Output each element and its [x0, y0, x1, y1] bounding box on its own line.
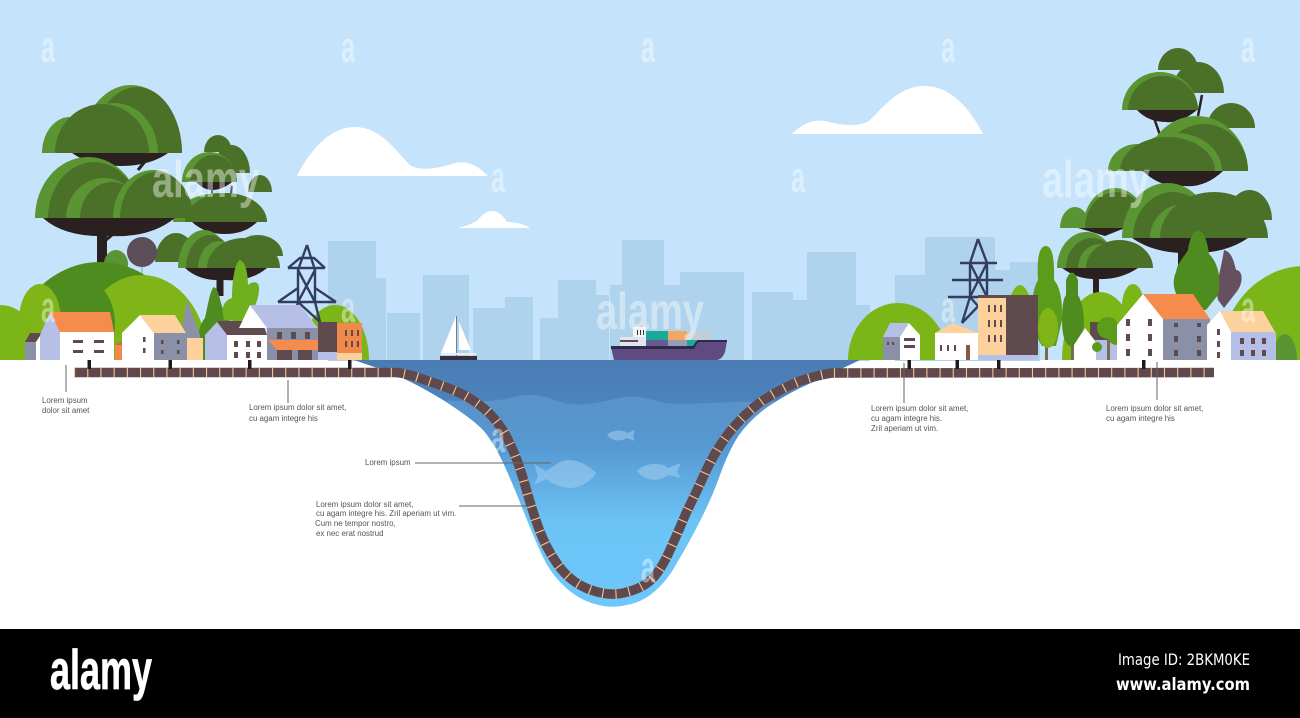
tree: lower	[155, 230, 283, 296]
house: tiny orange	[115, 338, 140, 360]
watermarks: a	[941, 283, 955, 332]
tree: top right cluster	[1122, 48, 1255, 135]
callout: left two-line: Lorem ipsum dolor sit amet,	[249, 403, 346, 412]
footer image id: Image ID: 2BKM0KE	[1118, 650, 1250, 669]
footer logo: alamy	[50, 638, 152, 701]
callout: lorem ipsum dolor sit amet short: Lorem ipsum	[42, 396, 88, 405]
watermarks: a	[641, 543, 655, 592]
right houses	[883, 294, 1276, 360]
watermarks	[41, 23, 1255, 592]
callout: left two-line	[249, 380, 346, 423]
water wave band	[445, 395, 775, 420]
house: orange roof	[40, 312, 114, 360]
cloud small	[458, 211, 530, 228]
city skyline	[328, 237, 1040, 361]
house: small behind tree	[1074, 322, 1117, 360]
tree: centre cluster	[173, 135, 272, 234]
callout: lorem ipsum dolor sit amet short: dolor sit amet	[42, 406, 90, 415]
callout: far right two-line: cu agam integre his	[1106, 414, 1175, 423]
tree: mid right	[1060, 188, 1147, 236]
sailboat	[440, 316, 477, 360]
callout: left two-line: cu agam integre his	[249, 414, 318, 423]
fish: medium	[637, 463, 681, 480]
left hills	[0, 250, 369, 360]
building: orange block	[318, 322, 362, 360]
callout: water label: Lorem ipsum	[365, 458, 411, 467]
watermarks: alamy	[152, 151, 260, 209]
footer bar	[0, 629, 1300, 718]
cloud right	[792, 86, 983, 134]
pipeline supports	[88, 360, 1146, 369]
callout: right three-line: Lorem ipsum dolor sit amet,	[871, 404, 968, 413]
watermarks: alamy	[1042, 151, 1150, 209]
callout: far right two-line	[1106, 362, 1203, 423]
callout: far right two-line: Lorem ipsum dolor sit amet,	[1106, 404, 1203, 413]
callout: pipe label: Lorem ipsum dolor sit amet,	[316, 500, 413, 509]
watermarks: a	[41, 283, 55, 332]
watermarks: a	[1241, 23, 1255, 72]
house: peach low	[935, 323, 978, 360]
cargo ship	[611, 322, 727, 360]
house: small far left	[25, 333, 51, 360]
callout: right three-line	[871, 363, 968, 433]
callout: pipe label	[315, 500, 530, 538]
bush: green leaf	[1174, 230, 1220, 310]
callout: pipe label: cu agam integre his. Zril aperiam ut vim.	[316, 509, 456, 518]
tree: upper large right	[1108, 116, 1248, 186]
callout: pipe label: ex nec erat nostrud	[316, 529, 384, 538]
callout: lorem ipsum dolor sit amet short	[42, 365, 90, 415]
house: periwinkle small	[883, 323, 920, 360]
bare brown tree	[127, 237, 157, 276]
building: tall peach and brown	[978, 295, 1038, 360]
callout: right three-line: Zril aperiam ut vim.	[871, 424, 938, 433]
right trees	[1057, 48, 1272, 310]
watermarks: alamy	[596, 283, 704, 341]
left trees	[35, 85, 283, 296]
watermarks: a	[341, 283, 355, 332]
fish: large	[534, 460, 596, 488]
tree: small round right	[1092, 317, 1127, 360]
sky background	[0, 0, 1300, 360]
left houses	[25, 305, 362, 360]
callout: pipe label: Cum ne tempor nostro,	[315, 519, 396, 528]
watermarks: a	[491, 413, 505, 462]
transmission tower left	[278, 245, 336, 325]
house: dark roof	[205, 321, 267, 360]
watermarks: a	[41, 23, 55, 72]
cloud left	[297, 127, 488, 176]
watermarks: a	[941, 23, 955, 72]
house: periwinkle roof	[239, 305, 327, 360]
bush: purple leaf	[1217, 250, 1242, 308]
callout: right three-line: cu agam integre his.	[871, 414, 942, 423]
tree: lowest right	[1057, 232, 1153, 293]
watermarks: a	[341, 23, 355, 72]
watermarks: a	[791, 153, 805, 202]
bushes behind left houses	[180, 260, 259, 360]
right hills	[848, 266, 1300, 360]
footer url: www.alamy.com	[1116, 675, 1250, 695]
transmission tower right	[948, 239, 1007, 323]
house: orange roof right	[1117, 294, 1210, 360]
right greenery	[1032, 246, 1084, 360]
house: peach roof right	[1207, 311, 1276, 360]
fish: small	[607, 430, 635, 441]
tree: top left	[42, 85, 182, 170]
water basin	[354, 360, 860, 607]
watermarks: a	[491, 153, 505, 202]
watermarks: a	[1241, 283, 1255, 332]
tree: lower large right	[1122, 183, 1272, 300]
house: peach roof	[122, 315, 187, 360]
pipeline	[74, 372, 1214, 594]
watermarks: a	[641, 23, 655, 72]
tree: large left	[35, 157, 193, 265]
